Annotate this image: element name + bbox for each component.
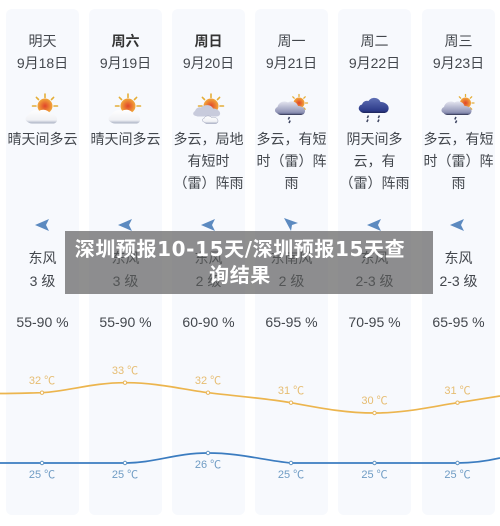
date heading: 明天: [28, 33, 56, 49]
weather description: [174, 131, 244, 191]
wind: [112, 250, 140, 289]
icon: sun and cloud, day 1: [26, 94, 58, 124]
high temperature line: 31 ℃: [444, 385, 471, 397]
wind arrow, day 6: [450, 219, 464, 231]
humidity: 65-95 %: [432, 314, 485, 330]
wind: 东风: [112, 250, 140, 266]
weather description: 雨: [284, 175, 298, 191]
low temperature line: 26 ℃: [195, 459, 221, 471]
weather description: 雨: [452, 175, 466, 191]
date heading: [433, 33, 484, 71]
low temperature line: 25 ℃: [278, 469, 304, 481]
wind: 东风: [360, 250, 388, 266]
icon: cloud with sun and showers, day 4: [275, 94, 308, 123]
humidity: 55-90 %: [99, 314, 152, 330]
high temperature line: [0, 365, 500, 415]
weather description: [424, 131, 494, 191]
high temperature line: 31 ℃: [278, 385, 304, 397]
date heading: 周三: [444, 33, 472, 49]
wind: [355, 250, 394, 289]
wind: 东风: [28, 250, 56, 266]
wind: [194, 250, 222, 289]
date heading: 周日: [194, 33, 222, 49]
icon: cloud with sun and showers, day 6: [441, 94, 474, 123]
title: [75, 237, 405, 287]
weather description: 有短时: [188, 153, 230, 169]
wind: [439, 250, 478, 289]
title: 深圳预报10-15天/深圳预报15天查: [75, 237, 405, 261]
date heading: 9月23日: [433, 55, 484, 71]
panel: day 4: [255, 9, 328, 515]
date heading: 9月19日: [100, 55, 151, 71]
date heading: [17, 33, 68, 71]
weather description: 阴天间多: [346, 131, 402, 147]
date heading: [349, 33, 400, 71]
wind arrow, day 3: [201, 219, 215, 231]
weather description: 多云，局地: [174, 131, 244, 147]
wind: 2-3 级: [355, 273, 394, 289]
high temperature line: 33 ℃: [112, 365, 138, 377]
humidity: 60-90 %: [182, 314, 235, 330]
wind: 2 级: [196, 273, 221, 289]
high temperature line: 32 ℃: [195, 375, 221, 387]
weather description: 时（雷）阵: [424, 153, 494, 169]
weather description: （雷）阵雨: [174, 175, 244, 191]
wind: 2-3 级: [439, 273, 478, 289]
panel: day 3: [172, 9, 245, 515]
date heading: 周一: [278, 33, 306, 49]
date heading: [183, 33, 234, 71]
wind: 东风: [444, 250, 472, 266]
panel: day 5: [338, 9, 411, 515]
low temperature line: 25 ℃: [112, 469, 138, 481]
wind: [270, 250, 312, 289]
date heading: [266, 33, 317, 71]
weather description: 多云，有短: [256, 131, 326, 147]
date heading: [100, 33, 151, 71]
wind arrow, day 4: [284, 218, 298, 231]
low temperature line: [0, 451, 500, 481]
weather description: 多云，有短: [424, 131, 494, 147]
low temperature line: 25 ℃: [361, 469, 388, 481]
icon: dark cloud with showers, day 5: [359, 98, 389, 122]
high temperature line: 32 ℃: [29, 375, 55, 387]
weather description: 时（雷）阵: [256, 153, 326, 169]
wind: 东南风: [270, 250, 312, 266]
low temperature line: 25 ℃: [29, 469, 55, 481]
date heading: 周二: [360, 33, 388, 49]
title: 询结果: [209, 263, 271, 287]
weather description: （雷）阵雨: [340, 175, 410, 191]
weather description: [256, 131, 326, 191]
humidity: 55-90 %: [16, 314, 69, 330]
wind: 东风: [194, 250, 222, 266]
wind: 3 级: [113, 273, 138, 289]
wind: [28, 250, 56, 289]
weather description: 晴天间多云: [8, 131, 78, 147]
humidity: 65-95 %: [265, 314, 318, 330]
weather description: 晴天间多云: [90, 131, 160, 147]
panel: day 1: [6, 9, 79, 515]
weather description: 云，有: [354, 153, 396, 169]
wind arrow, day 1: [35, 219, 49, 231]
wind arrow, day 2: [118, 219, 132, 231]
date heading: 周六: [112, 33, 140, 49]
wind: 3 级: [30, 273, 55, 289]
wind arrow, day 5: [367, 219, 381, 231]
panel: day 6: [422, 9, 495, 515]
panel: day 2: [89, 9, 162, 515]
date heading: 9月20日: [183, 55, 234, 71]
humidity: 70-95 %: [348, 314, 401, 330]
title banner: [65, 231, 433, 294]
icon: sun behind clouds, day 3: [193, 94, 224, 124]
date heading: 9月18日: [17, 55, 68, 71]
date heading: 9月22日: [349, 55, 400, 71]
low temperature line: 25 ℃: [444, 469, 471, 481]
high temperature line: 30 ℃: [361, 395, 388, 407]
wind: 2 级: [279, 273, 304, 289]
date heading: 9月21日: [266, 55, 317, 71]
icon: sun and cloud, day 2: [109, 94, 140, 124]
weather description: [340, 131, 410, 191]
